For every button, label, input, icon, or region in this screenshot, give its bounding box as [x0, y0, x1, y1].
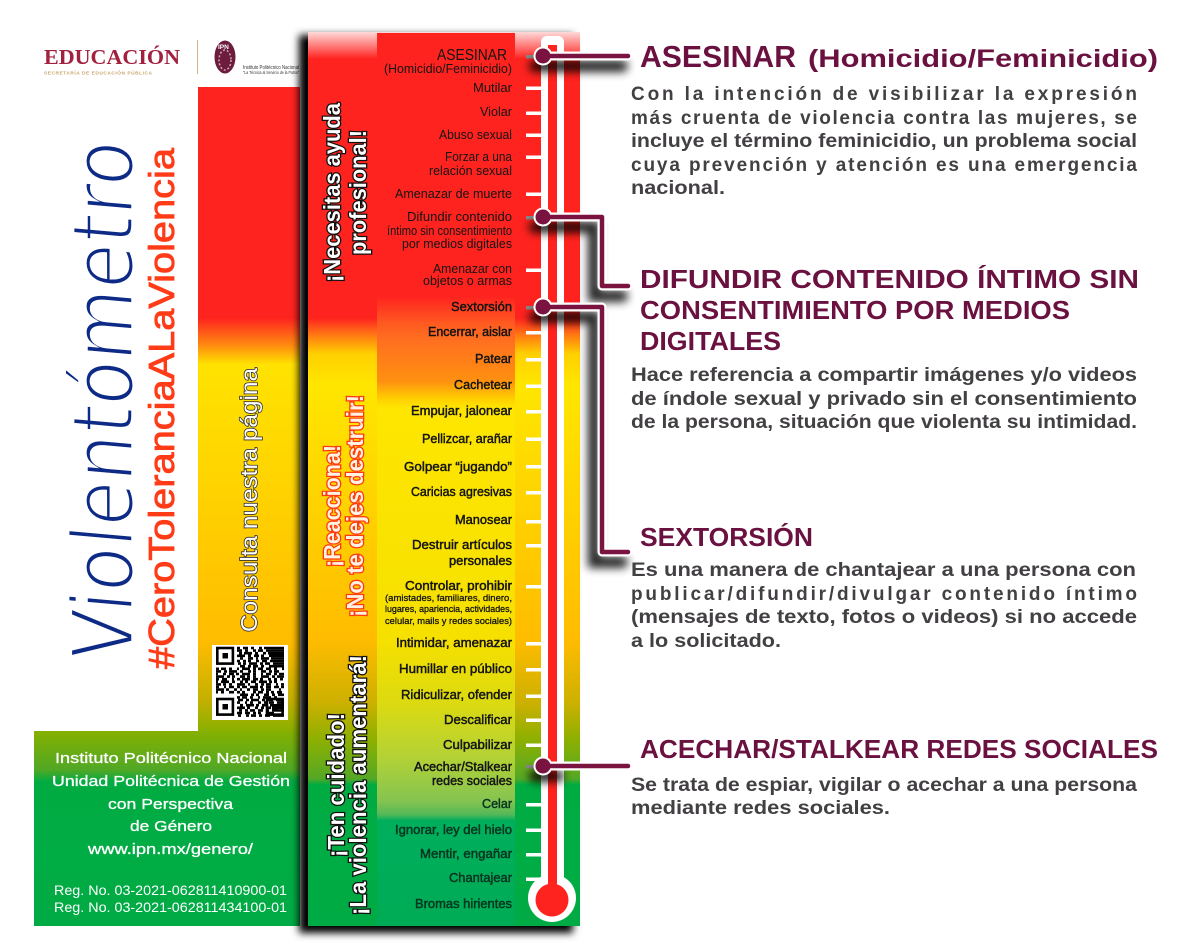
scale labels: por medios digitales [402, 237, 512, 251]
scale labels: (amistades, familiares, dinero, [385, 593, 512, 604]
scale labels: Bromas hirientes [415, 897, 512, 911]
footer institution text: Instituto Politécnico Nacional [55, 750, 287, 767]
scale labels: redes sociales [432, 774, 512, 788]
callout: ten cuidado: ¡Ten cuidado! [323, 713, 349, 857]
panel shadow [299, 35, 573, 933]
callout: ten cuidado: ¡La violencia aumentará! [345, 655, 371, 915]
scale labels: Abuso sexual [439, 128, 512, 142]
scale ticks [526, 55, 541, 881]
footer institution text: Unidad Politécnica de Gestión [52, 773, 290, 790]
body: acechar: Se trata de espiar, vigilar o acechar a una persona [631, 775, 1137, 796]
scale labels: Celar [482, 797, 512, 811]
callout: reacciona: ¡No te dejes destruir! [342, 395, 368, 617]
body: sextorsion [631, 560, 1137, 652]
logo: IPN shield [214, 40, 299, 75]
section: asesinar [631, 39, 1158, 199]
body: asesinar: Con la intención de visibilizar la expresión [631, 84, 1137, 105]
connector shadows [535, 66, 622, 776]
body: sextorsion: Es una manera de chantajear a una persona con [631, 560, 1136, 581]
body: difundir [631, 365, 1137, 433]
section: sextorsion: SEXTORSIÓN [640, 522, 813, 552]
registration numbers [54, 882, 287, 915]
scale labels: Intimidar, amenazar [396, 636, 512, 650]
registration numbers: Reg. No. 03-2021-062811410900-01 [54, 882, 287, 898]
connector: asesinar [534, 46, 628, 66]
callout: reacciona: ¡Reacciona! [319, 445, 345, 567]
scale labels: Humillar en público [399, 662, 512, 676]
scale labels: Violar [480, 105, 512, 119]
registration numbers: Reg. No. 03-2021-062811434100-01 [54, 899, 287, 915]
connector: sextorsion [534, 298, 628, 552]
scale labels: Empujar, jalonear [411, 404, 512, 418]
scale labels: Descalificar [444, 713, 512, 727]
body: sextorsion: (mensajes de texto, fotos o videos) si no accede [631, 607, 1137, 628]
body: acechar [631, 775, 1137, 819]
scale labels: íntimo sin consentimiento [387, 224, 512, 238]
scale labels: celular, mails y redes sociales) [385, 616, 512, 627]
panel: green footer [34, 731, 300, 926]
section: asesinar: ASESINAR [640, 39, 796, 74]
body: sextorsion: a lo solicitado. [631, 631, 781, 652]
QR code [212, 645, 288, 720]
title: Violentómetro: Violentómetro [54, 136, 154, 665]
body: asesinar [631, 84, 1137, 199]
logo: Educación: SECRETARÍA DE EDUCACIÓN PÚBLICA [44, 68, 153, 76]
scale labels: Controlar, prohibir [405, 579, 512, 593]
scale labels: lugares, apariencia, actividades, [385, 604, 512, 615]
scale labels: Destruir artículos [412, 538, 512, 552]
panel: violence scale [308, 32, 580, 926]
thermometer [528, 36, 576, 922]
scale labels: objetos o armas [423, 274, 512, 288]
logo: Educación: EDUCACIÓN [44, 45, 180, 69]
text: consult page: Consulta nuestra página [236, 368, 262, 632]
logo: IPN shield: IPN [218, 44, 229, 51]
body: asesinar: incluye el término feminicidio, un problema social [631, 131, 1137, 152]
scale labels: Difundir contenido [407, 210, 512, 224]
logo: IPN shield: "La Técnica al Servicio de la Patria" [243, 70, 299, 75]
scale labels: Amenazar con [433, 262, 512, 276]
scale labels: Mutilar [473, 81, 512, 95]
footer institution text: www.ipn.mx/genero/ [87, 841, 254, 858]
footer institution text: con Perspectiva [108, 796, 234, 813]
body: acechar: mediante redes sociales. [631, 798, 890, 819]
body: asesinar: nacional. [631, 178, 725, 199]
footer institution text [52, 750, 290, 858]
scale labels: Sextorsión [451, 300, 512, 314]
callout: reacciona [319, 395, 368, 617]
scale labels: Caricias agresivas [411, 485, 512, 499]
section: sextorsion [631, 522, 1137, 652]
scale labels: Pellizcar, arañar [422, 432, 512, 446]
section: difundir: DIFUNDIR CONTENIDO ÍNTIMO SIN [640, 264, 1139, 294]
scale labels: Ridiculizar, ofender [401, 688, 512, 702]
body: asesinar: más cruenta de violencia contra las mujeres, se [631, 108, 1137, 129]
scale labels: (Homicidio/Feminicidio) [384, 62, 512, 76]
scale labels: Cachetear [454, 378, 512, 392]
body: asesinar: cuya prevención y atención es una emergencia [631, 155, 1137, 176]
scale labels: Manosear [455, 513, 512, 527]
callout: necesitas ayuda: ¡Necesitas ayuda [319, 103, 345, 282]
hashtag: #CeroToleranciaALaViolencia [141, 147, 182, 669]
section: acechar [631, 734, 1158, 819]
connector: acechar [534, 756, 628, 776]
scale labels: Chantajear [449, 871, 512, 885]
scale labels: Encerrar, aislar [428, 325, 512, 339]
logo: IPN shield: Instituto Politécnico Nacional [243, 65, 299, 71]
callout: necesitas ayuda: profesional! [345, 130, 371, 255]
body: sextorsion: publicar/difundir/divulgar contenido íntimo [631, 584, 1137, 605]
scale labels [384, 47, 512, 911]
section: difundir: CONSENTIMIENTO POR MEDIOS [640, 295, 1070, 325]
scale labels: ASESINAR [437, 47, 507, 64]
section: asesinar: (Homicidio/Feminicidio) [808, 45, 1158, 73]
scale labels: Mentir, engañar [420, 847, 512, 861]
callout: ten cuidado [323, 655, 371, 915]
scale labels: Golpear “jugando” [404, 460, 512, 474]
callout: necesitas ayuda [319, 103, 371, 282]
scale labels: Amenazar de muerte [395, 187, 512, 201]
body: difundir: de índole sexual y privado sin el consentimiento [631, 389, 1137, 410]
scale labels: Acechar/Stalkear [414, 760, 512, 774]
scale labels: relación sexual [429, 164, 512, 178]
section: acechar: ACECHAR/STALKEAR REDES SOCIALES [640, 734, 1158, 764]
section: difundir: DIGITALES [640, 326, 781, 356]
body: difundir: Hace referencia a compartir imágenes y/o videos [631, 365, 1137, 386]
scale labels: Patear [475, 352, 512, 366]
scale labels: personales [449, 554, 512, 568]
panel: left colour band [198, 87, 300, 733]
footer institution text: de Género [130, 818, 212, 835]
scale labels: Forzar a una [445, 150, 512, 164]
body: difundir: de la persona, situación que violenta su intimidad. [631, 412, 1137, 433]
scale labels: Culpabilizar [443, 738, 512, 752]
section: difundir [631, 264, 1139, 433]
scale labels: Ignorar, ley del hielo [395, 823, 512, 837]
connector: difundir [534, 208, 628, 286]
header logos [44, 40, 299, 76]
